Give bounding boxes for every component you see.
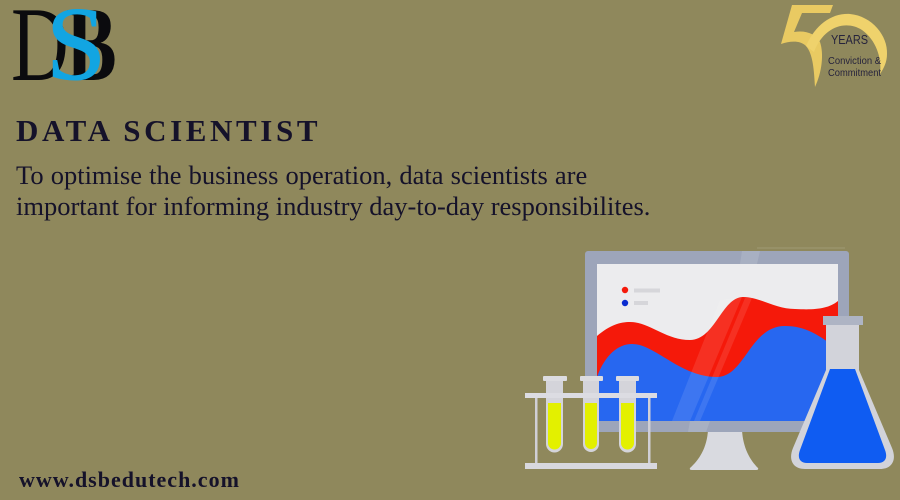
icon: flask <box>791 316 894 469</box>
description text <box>16 160 650 221</box>
badge text: YEARS <box>831 33 868 47</box>
chart legend <box>622 287 660 306</box>
badge text <box>828 33 881 79</box>
description text: important for informing industry day-to-day responsibilites. <box>16 191 650 221</box>
logo: 50 years badge <box>781 5 887 87</box>
icon: test tube 2 <box>580 376 603 452</box>
badge text: Conviction & <box>828 56 881 67</box>
description text: To optimise the business operation, data scientists are <box>16 160 587 190</box>
website url: www.dsbedutech.com <box>19 467 240 492</box>
icon: gold 50 emblem <box>781 5 887 87</box>
icon: test tube 1 <box>543 376 567 452</box>
chart: screen with area waves <box>597 264 838 421</box>
badge text: Commitment <box>828 68 881 79</box>
icon: monitor stand <box>690 430 758 470</box>
icon: monitor frame <box>585 251 849 432</box>
icon: test tube 3 <box>616 376 639 452</box>
logo: DSB <box>11 0 117 90</box>
title: DATA SCIENTIST <box>16 113 321 148</box>
icon: test tube rack <box>525 376 657 469</box>
